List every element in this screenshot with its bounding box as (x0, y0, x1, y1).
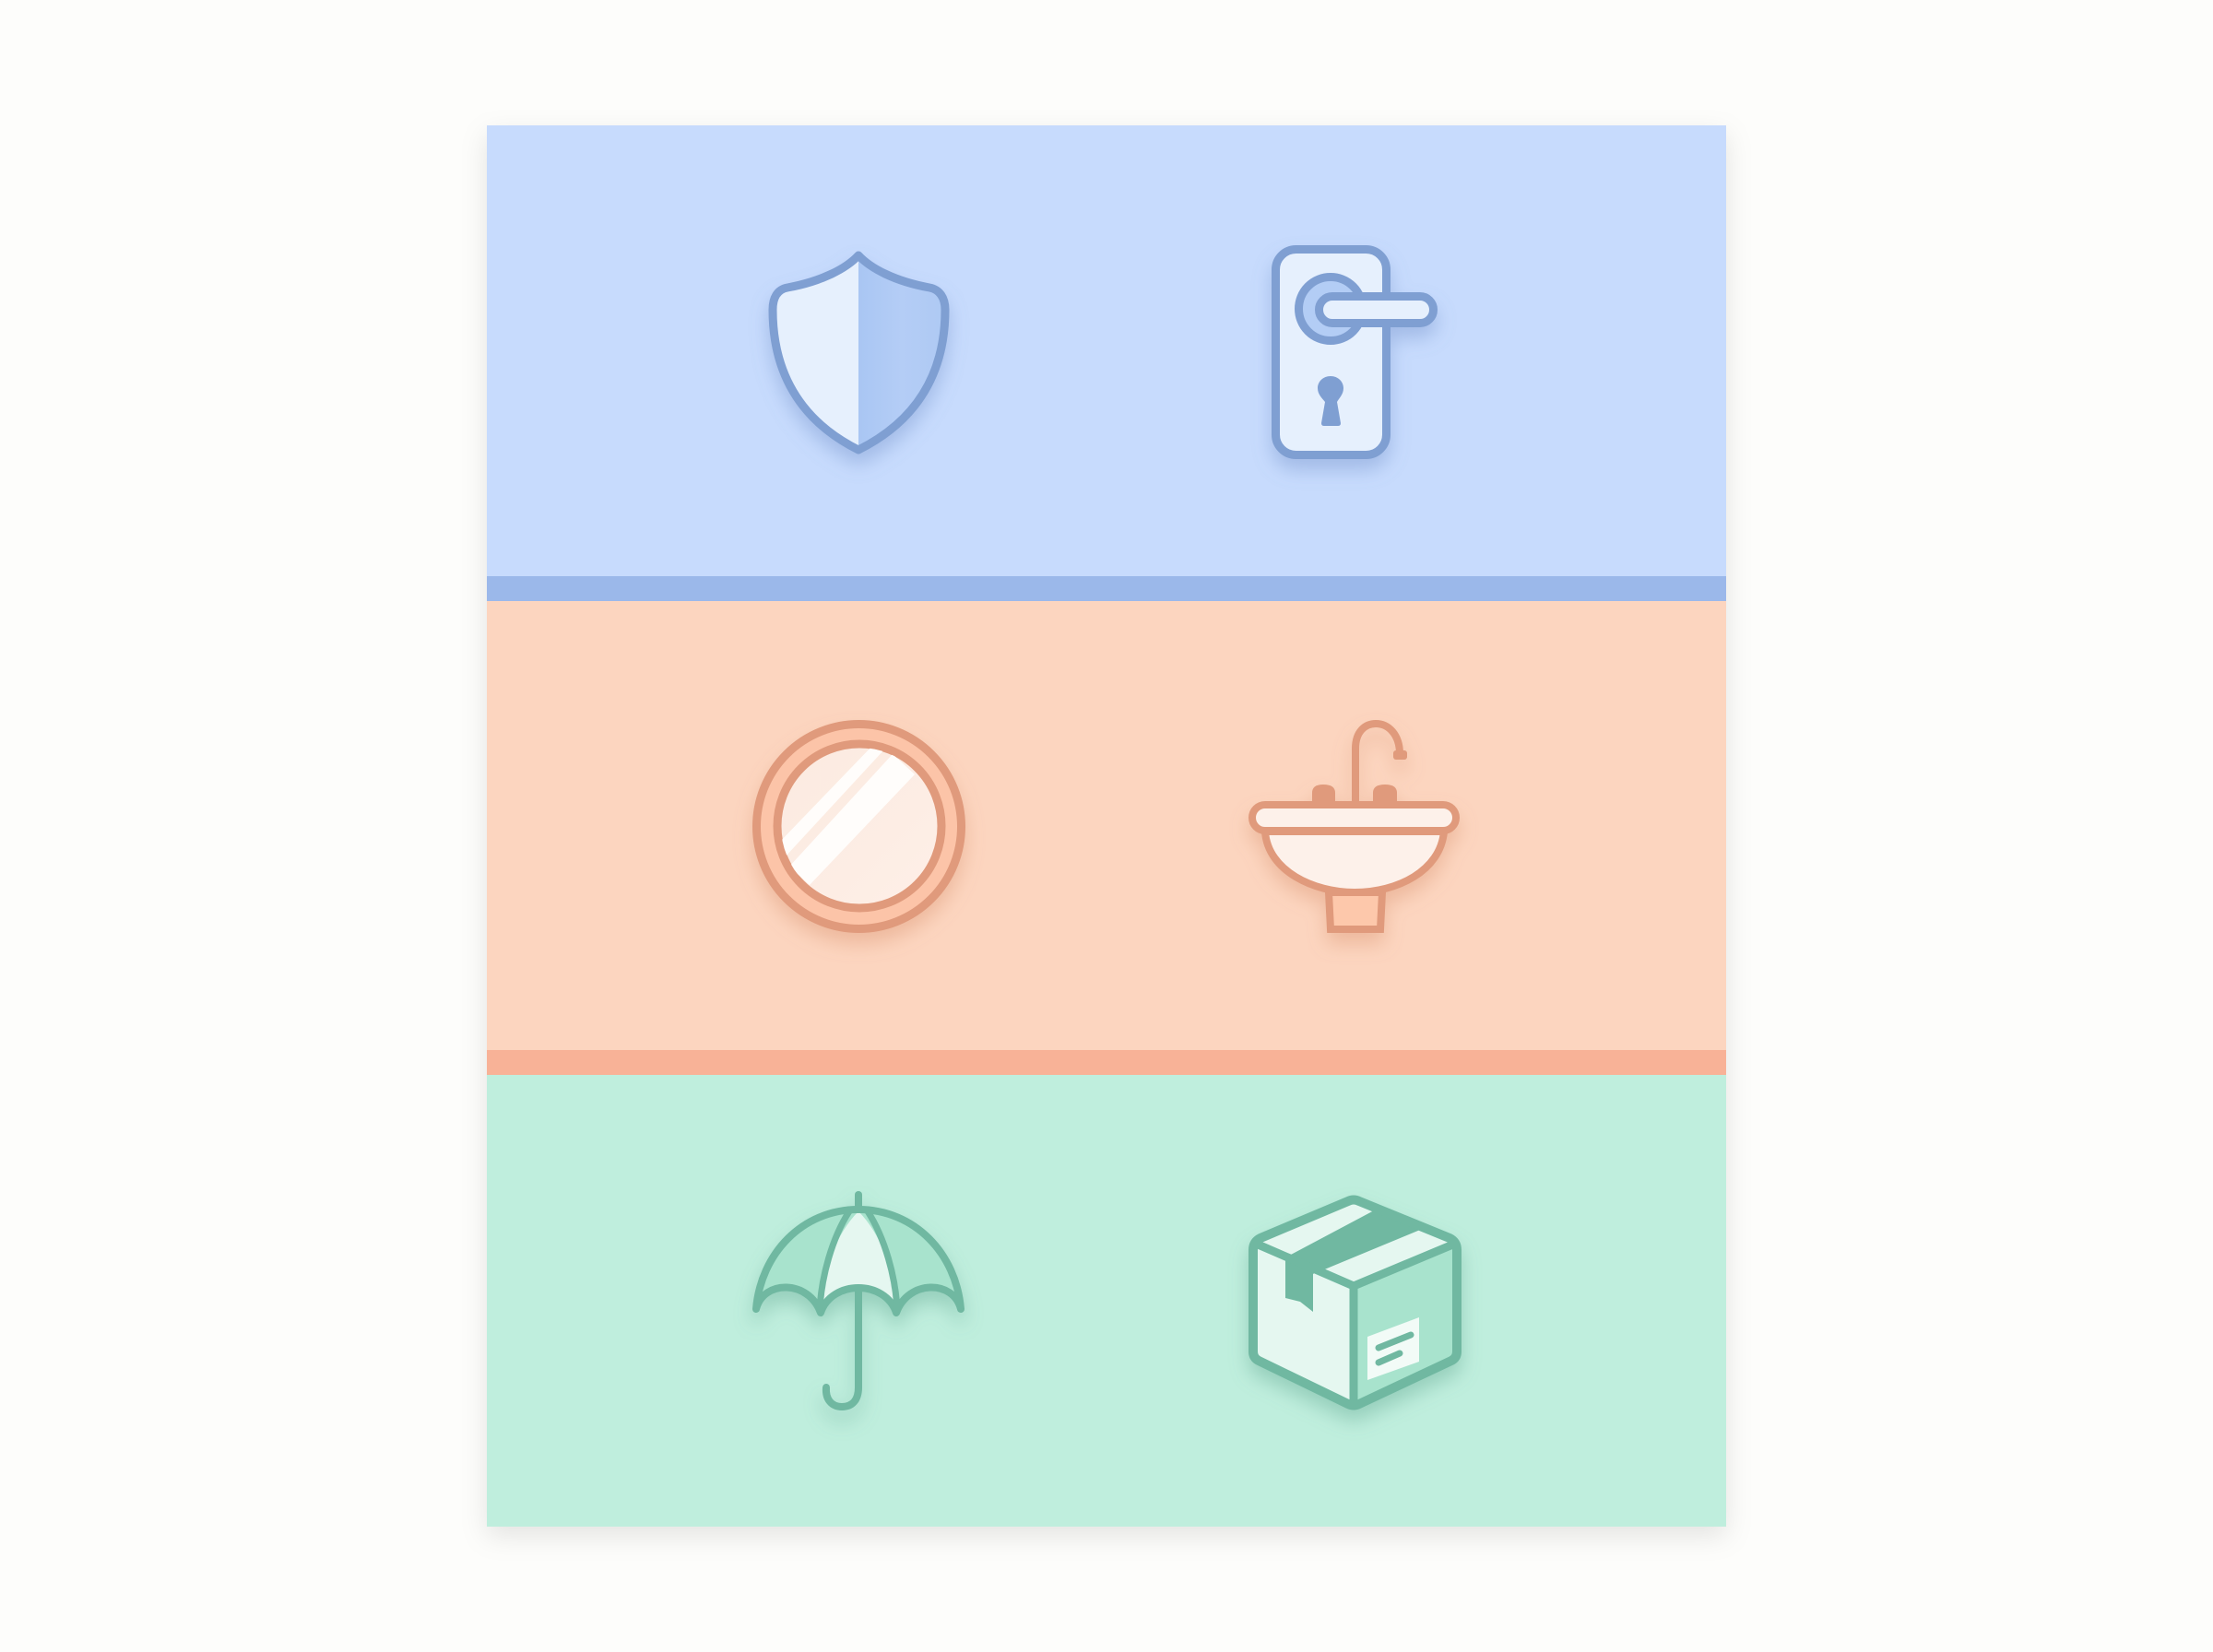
icon: round mirror (756, 725, 961, 929)
icon: cardboard box (1253, 1200, 1457, 1405)
panel: peach (487, 601, 1726, 1075)
infographic: three colour panels of icons (481, 125, 1732, 1541)
panel: green (487, 1075, 1726, 1527)
panel card background (487, 125, 1726, 1527)
icon: door handle with keyhole (1276, 249, 1433, 455)
icon: sink with faucet (1252, 724, 1456, 929)
shipping label (1367, 1317, 1419, 1380)
icon: shield (773, 255, 945, 450)
icon: umbrella (756, 1195, 961, 1407)
panel: blue (487, 125, 1726, 601)
